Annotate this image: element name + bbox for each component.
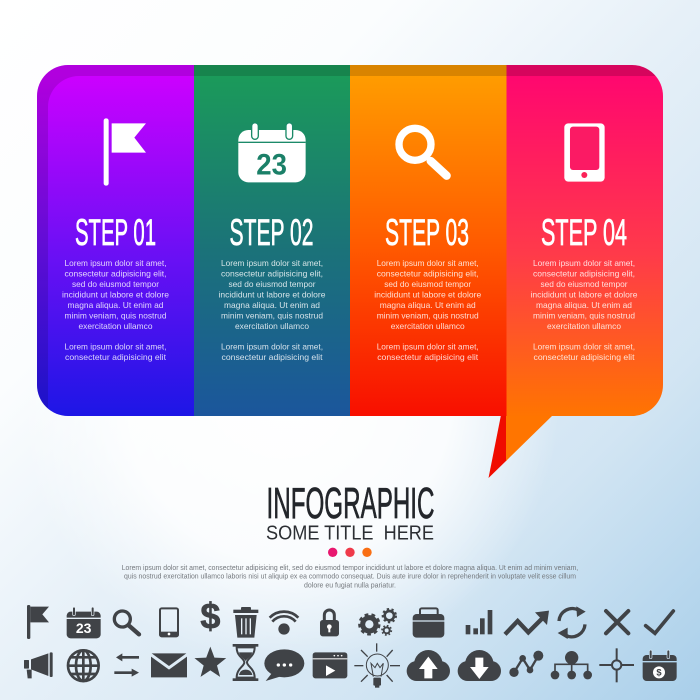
text block: step 02: incididunt ut labore et dolore	[218, 290, 326, 300]
text block: step 01	[62, 258, 169, 362]
text block: step 01: magna aliqua. Ut enim ad	[68, 300, 164, 310]
icon: check mark	[646, 611, 673, 633]
icon: calendar: 23	[256, 148, 287, 181]
description paragraph	[122, 565, 578, 589]
text block: step 03: minim veniam, quis nostrud	[377, 310, 479, 320]
text block: step 03: consectetur adipisicing elit	[377, 352, 479, 362]
text block: step 03: consectetur adipisicing elit,	[377, 268, 479, 278]
text block: step 02: minim veniam, quis nostrud	[221, 310, 323, 320]
text block: step 01: Lorem ipsum dolor sit amet,	[64, 258, 166, 268]
icon: megaphone	[24, 652, 53, 678]
icon: trend arrow	[505, 611, 549, 634]
icon: cloud upload	[407, 650, 450, 681]
icon row: right half	[354, 606, 677, 688]
text block: step 01: incididunt ut labore et dolore	[62, 290, 169, 300]
text block: step 03: exercitation ullamco	[391, 321, 465, 331]
text block: step 01: Lorem ipsum dolor sit amet,	[64, 342, 166, 352]
icon: hourglass	[233, 644, 258, 681]
text block: step 02: Lorem ipsum dolor sit amet,	[221, 258, 323, 268]
icon: cloud download	[458, 650, 501, 681]
bubble tail	[488, 415, 553, 478]
text block: step 04: sed do eiusmod tempor	[540, 279, 628, 289]
icon: flag	[104, 118, 146, 186]
icon: video player	[313, 652, 347, 678]
icon: transfer arrows	[114, 653, 139, 677]
text block: step 03: sed do eiusmod tempor	[384, 279, 471, 289]
subtitle: SOME TITLE HERE	[266, 522, 434, 544]
text block: step 01: consectetur adipisicing elit,	[64, 268, 166, 278]
icon: magnifier	[114, 611, 139, 634]
description paragraph: quis nostrud exercitation ullamco laboris nisi ut aliquip ex ea commodo consequat. Duis aute irure dolor in reprehenderit in voluptate velit esse cillum	[124, 574, 576, 581]
icon: hierarchy	[551, 651, 592, 679]
text block: step 04: consectetur adipisicing elit	[534, 352, 635, 362]
text block: step 03: magna aliqua. Ut enim ad	[380, 300, 476, 310]
text block: step 02	[218, 258, 326, 362]
heading: step 04: STEP 04	[541, 212, 627, 253]
panel: step 03	[374, 128, 482, 362]
three dots	[328, 548, 372, 557]
text block: step 01: minim veniam, quis nostrud	[64, 310, 167, 320]
text block: step 01: consectetur adipisicing elit	[65, 352, 167, 362]
icon: calendar dollar: $	[656, 668, 662, 678]
icon: light bulb	[354, 643, 400, 688]
text block: step 04	[530, 258, 638, 362]
text block: step 02: Lorem ipsum dolor sit amet,	[221, 342, 323, 352]
text block: step 04: exercitation ullamco	[547, 321, 621, 331]
icon: globe	[68, 650, 99, 681]
description paragraph: Lorem ipsum dolor sit amet, consectetur adipisicing elit, sed do eiusmod tempor incididunt ut labore et dolore magna aliqua. Ut enim ad minim veniam,	[122, 565, 578, 572]
icon: refresh	[558, 606, 586, 639]
panel: step 04	[530, 123, 638, 362]
text block: step 02: sed do eiusmod tempor	[228, 279, 316, 289]
text block: step 02: exercitation ullamco	[235, 321, 309, 331]
icon: calendar dollar	[643, 650, 677, 681]
icon: dollar: $	[200, 596, 220, 637]
heading: step 01: STEP 01	[75, 212, 156, 253]
description paragraph: dolore eu fugiat nulla pariatur.	[304, 582, 396, 589]
icon: speech bubble	[264, 649, 304, 681]
icon: calendar	[67, 607, 101, 638]
icon row: left half	[24, 596, 347, 681]
text block: step 03: incididunt ut labore et dolore	[374, 290, 482, 300]
icon: gears	[360, 609, 396, 635]
icon: tablet	[160, 608, 178, 636]
panel: speech bubble	[37, 65, 664, 478]
text block: step 04: Lorem ipsum dolor sit amet,	[533, 342, 635, 352]
text block: step 01: exercitation ullamco	[78, 321, 153, 331]
text block: step 04: Lorem ipsum dolor sit amet,	[533, 258, 635, 268]
text block: step 03: Lorem ipsum dolor sit amet,	[377, 258, 479, 268]
icon: node chart	[509, 651, 543, 677]
text block: step 03: Lorem ipsum dolor sit amet,	[377, 342, 479, 352]
icon: crosshair	[599, 648, 634, 682]
icon: envelope	[151, 653, 187, 677]
text block: step 01: sed do eiusmod tempor	[72, 279, 159, 289]
icon: cross	[606, 611, 628, 633]
panel: step 01	[62, 118, 169, 362]
icon: star	[194, 647, 226, 677]
text block: step 02: consectetur adipisicing elit,	[221, 268, 323, 278]
icon: tablet	[564, 123, 605, 182]
icon: padlock	[320, 610, 339, 636]
text block: step 02: magna aliqua. Ut enim ad	[224, 300, 320, 310]
icon: calendar	[238, 123, 306, 182]
title: INFOGRAPHIC	[266, 480, 434, 528]
icon: briefcase	[413, 608, 444, 638]
text block: step 04: magna aliqua. Ut enim ad	[536, 300, 632, 310]
heading: step 03: STEP 03	[385, 212, 469, 253]
text block: step 04: minim veniam, quis nostrud	[533, 310, 635, 320]
text block: step 04: consectetur adipisicing elit,	[533, 268, 635, 278]
text block: step 04: incididunt ut labore et dolore	[530, 290, 638, 300]
icon: magnifier	[399, 128, 447, 176]
icon: wifi	[270, 612, 298, 635]
icon: flag	[27, 605, 49, 639]
text block: step 03	[374, 258, 482, 362]
heading: step 02: STEP 02	[230, 212, 314, 253]
column backgrounds	[37, 65, 664, 416]
icon: calendar: 23	[76, 620, 92, 636]
icon: trash can	[233, 607, 258, 638]
text block: step 02: consectetur adipisicing elit	[222, 352, 323, 362]
panel: step 02	[218, 123, 326, 362]
icon: bar chart	[466, 610, 492, 634]
